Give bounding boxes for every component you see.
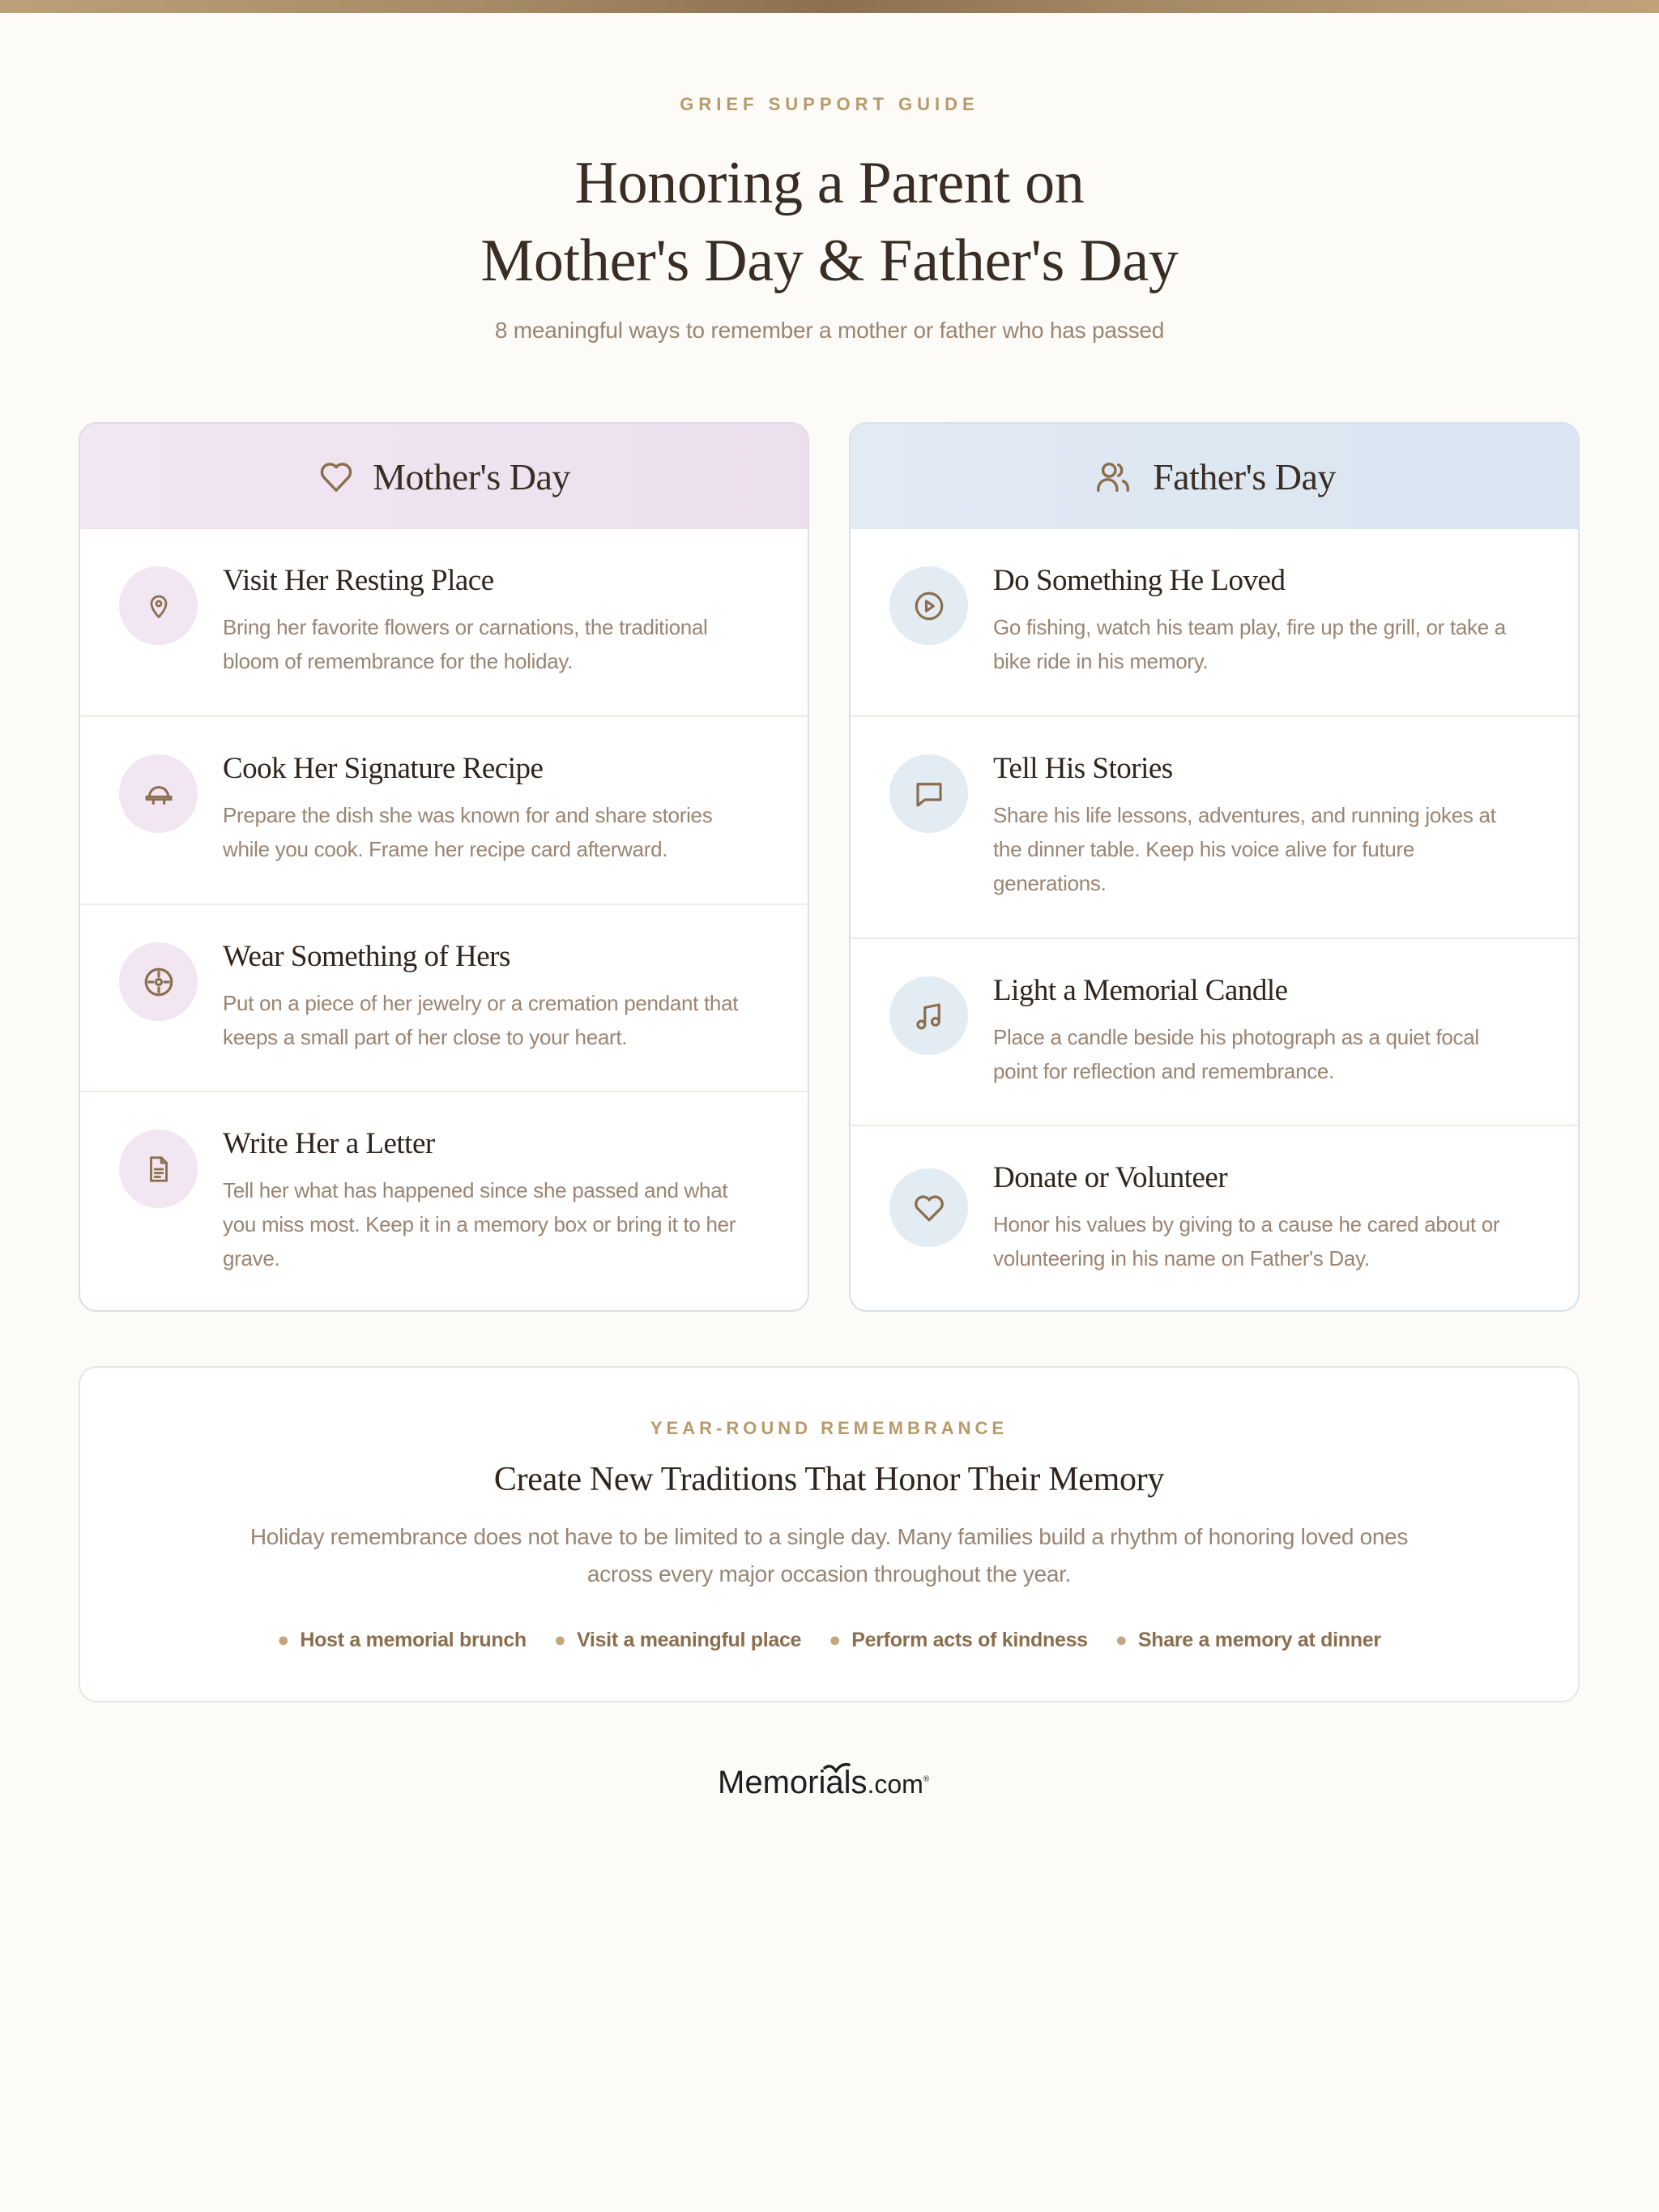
item: Tell His Stories: the dinner table. Keep his voice alive for future <box>993 837 1414 861</box>
item: Visit Her Resting Place: bloom of remembrance for the holiday. <box>223 649 573 673</box>
tradition bullets: ● Share a memory at dinner <box>1115 1629 1381 1651</box>
item: Donate or Volunteer: Honor his values by giving to a cause he cared about or <box>993 1212 1499 1236</box>
heading: Create New Traditions That Honor Their Memory <box>494 1461 1164 1498</box>
item: Visit Her Resting Place: Visit Her Resting Place <box>223 564 494 597</box>
item: Tell His Stories: generations. <box>993 871 1107 895</box>
item: Write Her a Letter: Tell her what has happened since she passed and what <box>223 1178 727 1202</box>
icon: pin <box>119 566 198 645</box>
item: Light a Memorial Candle: Place a candle beside his photograph as a quiet focal <box>993 1025 1479 1049</box>
icon: play <box>889 566 968 645</box>
item: Write Her a Letter <box>80 1091 808 1313</box>
panel: Father's Day <box>849 422 1580 1312</box>
item: Do Something He Loved: Go fishing, watch his team play, fire up the grill, or take a <box>993 615 1506 639</box>
tradition bullets: ● Host a memorial brunch <box>277 1629 527 1651</box>
title <box>480 150 1179 294</box>
icon: heart <box>889 1168 968 1247</box>
item: Do Something He Loved: Do Something He Loved <box>993 564 1285 597</box>
body text <box>250 1524 1408 1586</box>
item: Visit Her Resting Place <box>119 564 708 673</box>
title: Honoring a Parent on <box>574 150 1085 216</box>
item: Donate or Volunteer: volunteering in his name on Father's Day. <box>993 1246 1370 1270</box>
item: Write Her a Letter: Write Her a Letter <box>223 1127 435 1160</box>
body text: across every major occasion throughout the year. <box>587 1561 1071 1586</box>
item: Wear Something of Hers: keeps a small part of her close to your heart. <box>223 1025 627 1049</box>
panel: Mother's Day <box>79 422 809 1312</box>
icon: document <box>119 1129 198 1208</box>
item: Do Something He Loved: bike ride in his memory. <box>993 649 1208 673</box>
label: YEAR-ROUND REMEMBRANCE <box>650 1418 1008 1438</box>
tradition bullets: ● Visit a meaningful place <box>554 1629 801 1651</box>
item: Cook Her Signature Recipe: Cook Her Signature Recipe <box>223 752 543 785</box>
icon: jewel <box>119 942 198 1021</box>
header: Father's Day: Father's Day <box>1153 455 1336 497</box>
item: Tell His Stories <box>851 715 1578 937</box>
item: Wear Something of Hers <box>80 903 808 1091</box>
subtitle: 8 meaningful ways to remember a mother or father who has passed <box>495 318 1164 343</box>
item: Donate or Volunteer: Donate or Volunteer <box>993 1161 1227 1194</box>
item: Light a Memorial Candle: Light a Memorial Candle <box>993 974 1288 1007</box>
item: Write Her a Letter: you miss most. Keep it in a memory box or bring it to her <box>223 1212 736 1236</box>
item: Do Something He Loved <box>889 564 1507 673</box>
item: Wear Something of Hers: Wear Something of Hers <box>223 940 510 973</box>
item: Cook Her Signature Recipe <box>80 715 808 903</box>
item: Light a Memorial Candle: point for reflection and remembrance. <box>993 1059 1334 1083</box>
item: Cook Her Signature Recipe: Prepare the dish she was known for and share stories <box>223 803 712 827</box>
top decorative bar <box>0 0 1659 13</box>
item: Donate or Volunteer <box>851 1125 1578 1313</box>
item: Light a Memorial Candle <box>851 937 1578 1125</box>
logo: Memorials.com: Memorials.com® <box>718 1765 929 1800</box>
eyebrow label: GRIEF SUPPORT GUIDE <box>680 94 979 114</box>
item: Wear Something of Hers: Put on a piece of her jewelry or a cremation pendant that <box>223 991 738 1015</box>
icon: speech bubble <box>889 754 968 833</box>
panel: year-round remembrance <box>79 1366 1580 1702</box>
tradition bullets: ● Perform acts of kindness <box>829 1629 1088 1651</box>
item: Tell His Stories: Tell His Stories <box>993 752 1173 785</box>
item: Write Her a Letter: grave. <box>223 1246 279 1270</box>
item: Tell His Stories: Share his life lessons, adventures, and running jokes at <box>993 803 1496 827</box>
icon: chef <box>119 754 198 833</box>
header: Mother's Day: Mother's Day <box>373 455 570 497</box>
item: Visit Her Resting Place: Bring her favorite flowers or carnations, the traditional <box>223 615 708 639</box>
body text: Holiday remembrance does not have to be limited to a single day. Many families build a rhythm of honoring loved ones <box>250 1524 1408 1549</box>
item: Cook Her Signature Recipe: while you cook. Frame her recipe card afterward. <box>223 837 667 861</box>
tradition bullets <box>277 1629 1381 1651</box>
header: Father's Day <box>851 424 1578 529</box>
icon: music note <box>889 976 968 1055</box>
header: Mother's Day <box>80 424 808 529</box>
title: Mother's Day & Father's Day <box>480 228 1179 294</box>
